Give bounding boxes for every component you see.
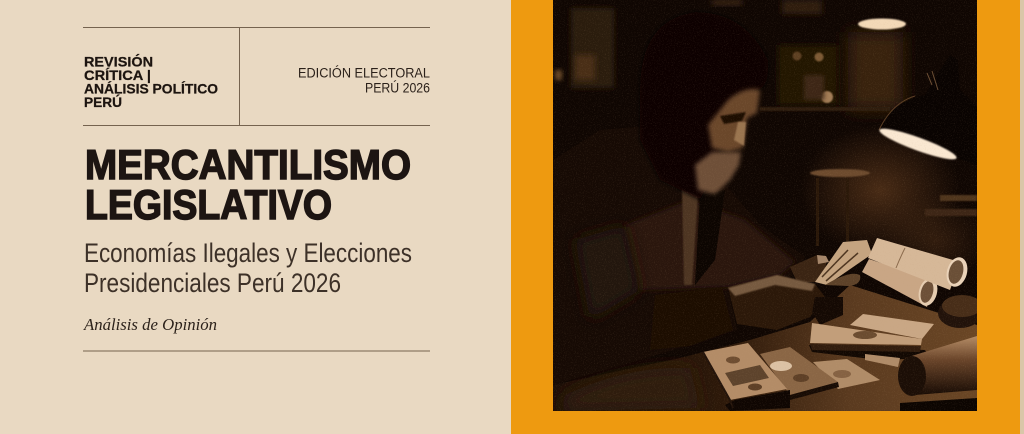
publication name [84, 54, 218, 110]
masthead: publication and edition header [83, 27, 430, 126]
stool [810, 169, 977, 246]
grain [553, 0, 977, 411]
panel: orange frame [511, 0, 1020, 434]
edition label: PERÚ 2026 [365, 80, 430, 96]
edition label: EDICIÓN ELECTORAL [298, 66, 430, 80]
panel: beige text panel [0, 0, 511, 434]
front paper roll [898, 336, 977, 411]
byline: opinion analysis: Análisis de Opinión [83, 315, 217, 334]
publication name: ANÁLISIS POLÍTICO [84, 82, 218, 96]
title [85, 141, 411, 228]
man: head and hair [640, 125, 704, 201]
subtitle: Economías Ilegales y Elecciones [84, 238, 412, 268]
man: lit face [708, 89, 760, 152]
lamp base [938, 295, 977, 328]
publication name: REVISIÓN [84, 54, 153, 70]
paper rolls [862, 238, 971, 308]
title: LEGISLATIVO [85, 181, 332, 228]
hanging lamp [858, 18, 906, 30]
background: dim bar with window and bottles [553, 0, 977, 262]
edition label [298, 66, 430, 96]
hands holding banknotes [728, 240, 872, 330]
man: jacket [568, 190, 796, 350]
man: beard [695, 152, 741, 194]
publication name: CRÍTICA | [84, 68, 151, 83]
publication name: PERÚ [84, 95, 122, 110]
subtitle [84, 238, 412, 298]
banknote stacks [703, 314, 934, 411]
photo: bearded man counting money under a desk lamp [553, 0, 990, 411]
title: MERCANTILISMO [85, 141, 411, 188]
desk lamp [878, 70, 958, 160]
table [553, 285, 977, 411]
subtitle: Presidenciales Perú 2026 [84, 268, 341, 298]
